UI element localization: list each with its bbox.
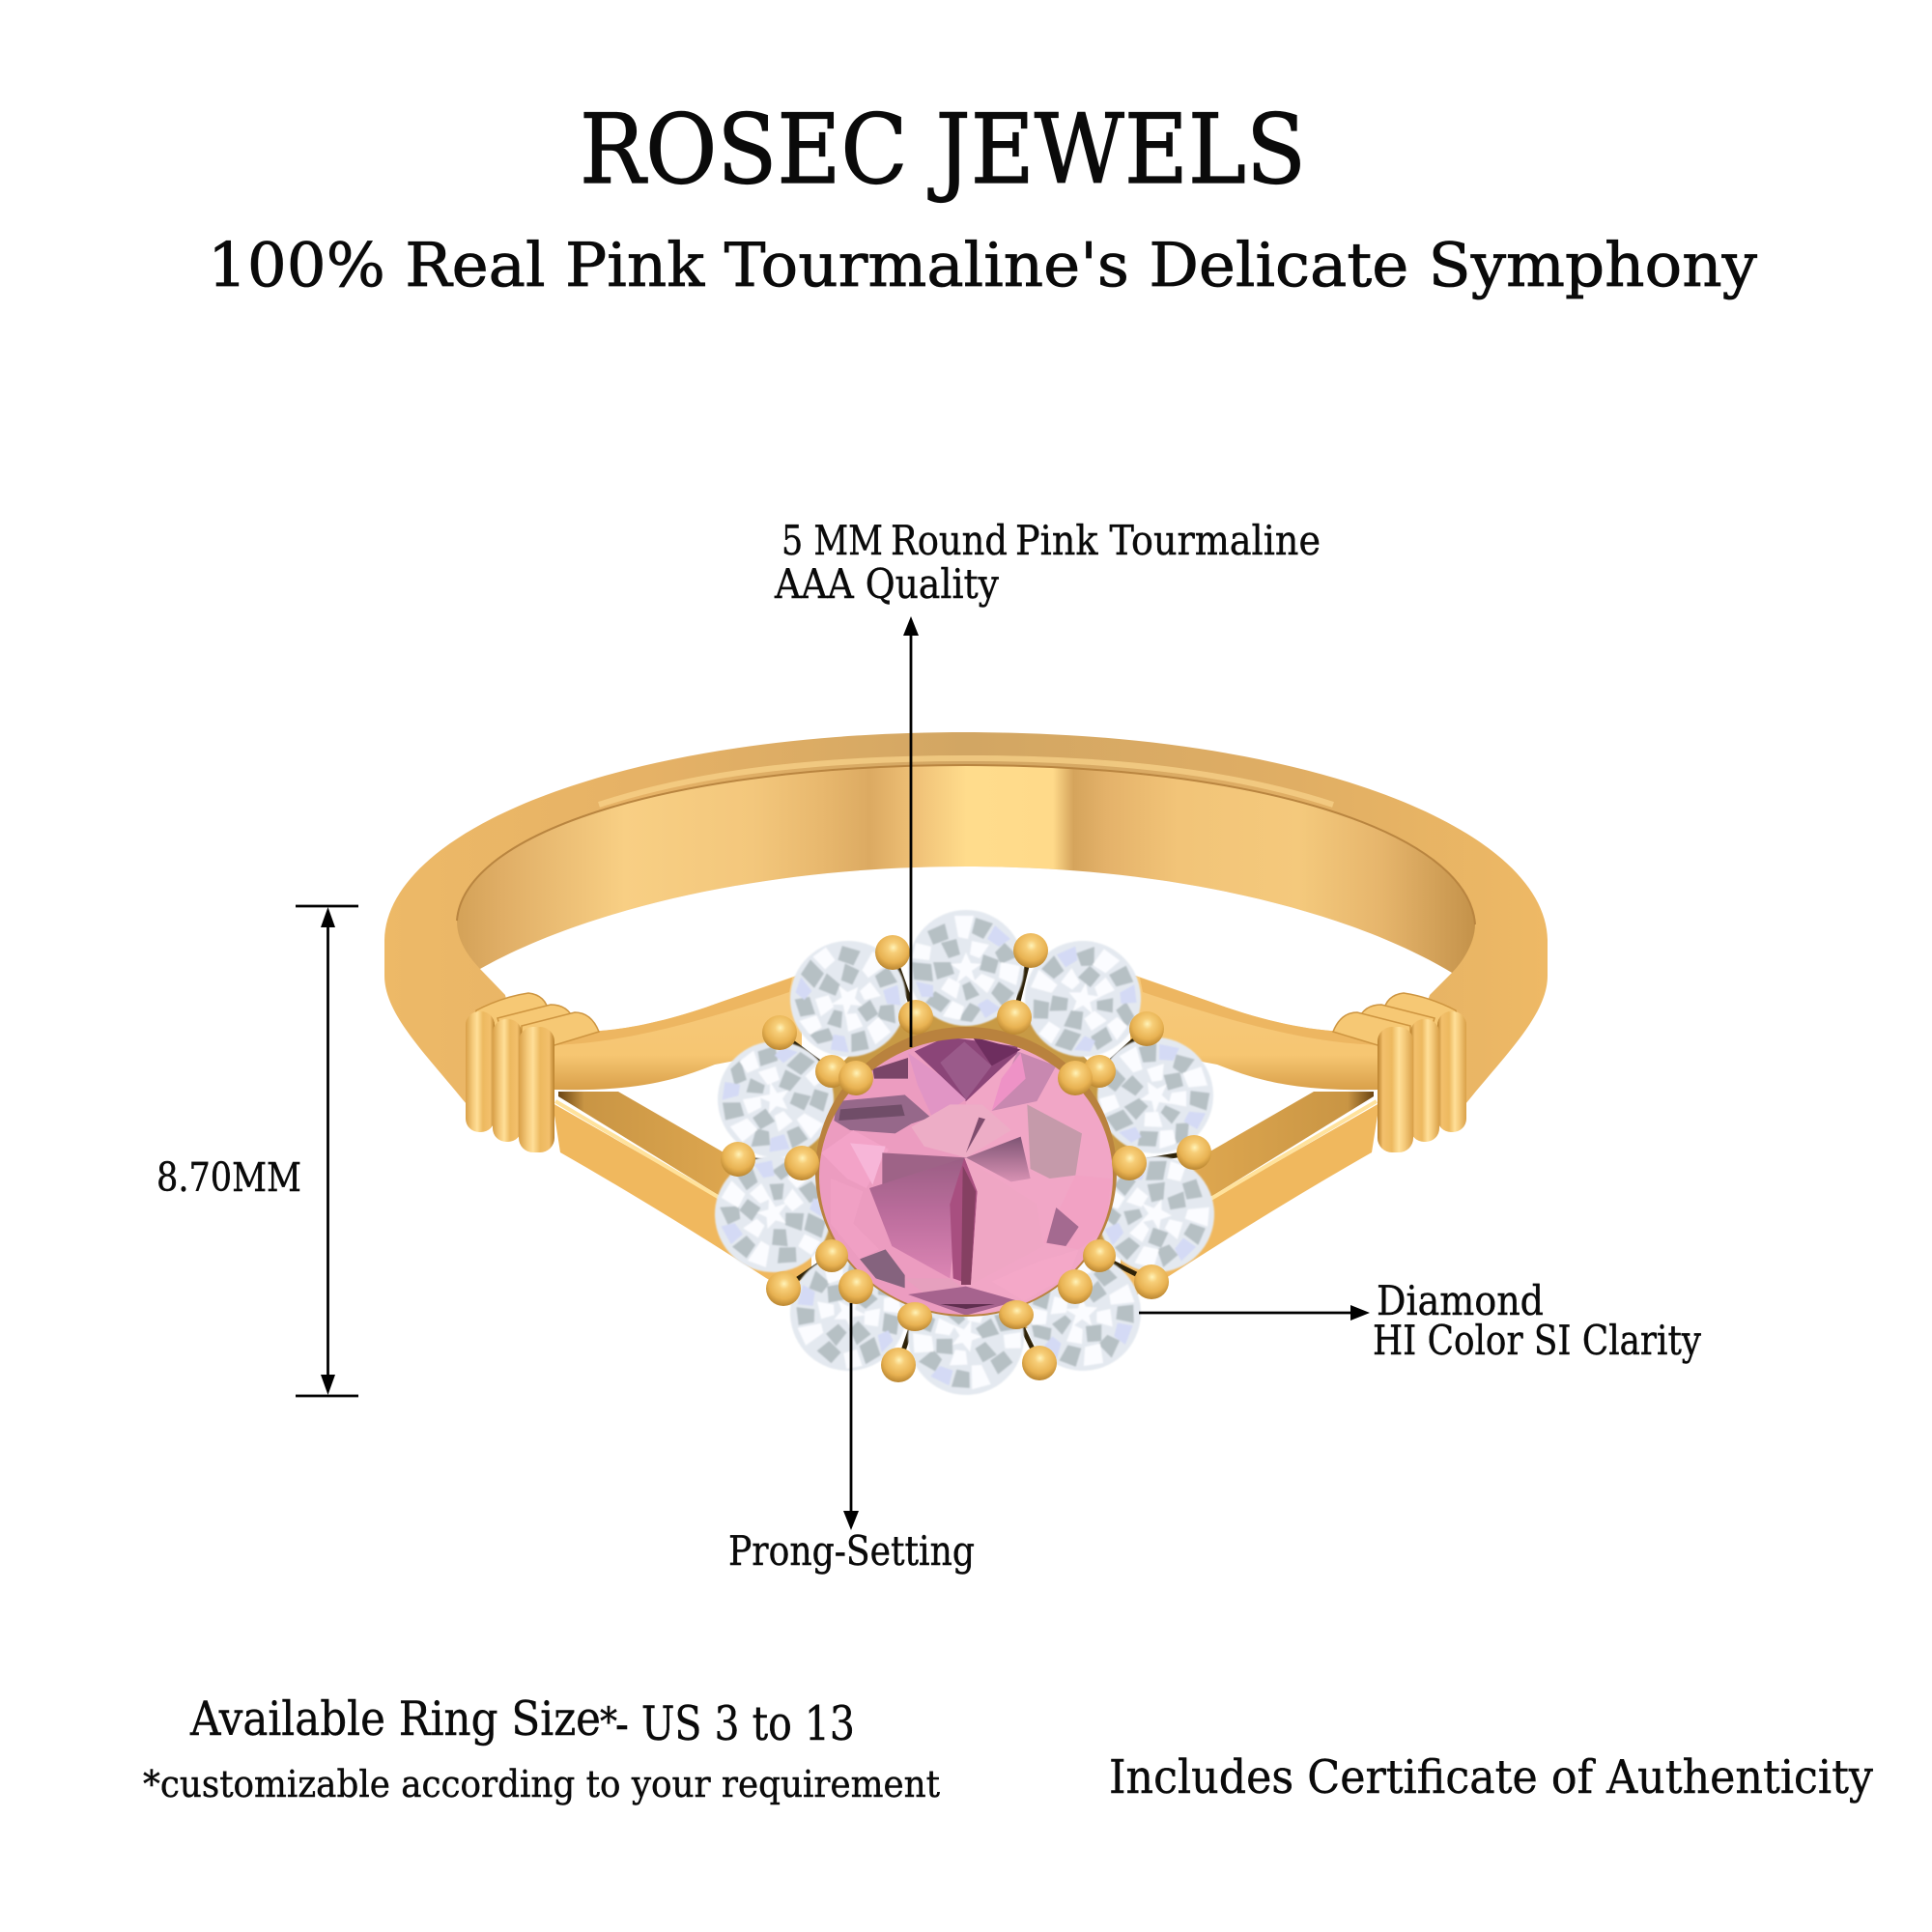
stone seat rim <box>815 1027 1117 1317</box>
text: asterisk: * <box>600 1700 617 1745</box>
band lip highlight <box>457 758 1475 924</box>
gold setting under the stones <box>800 1008 1132 1340</box>
prong wires <box>738 951 1194 1365</box>
label: diamond: Diamond <box>1377 1277 1544 1324</box>
callout: prong setting <box>728 1303 975 1575</box>
diamond right upper <box>1076 1016 1235 1175</box>
diamond right lower <box>1094 1151 1219 1277</box>
diamond top right <box>1006 922 1160 1076</box>
subtitle: 100% Real Pink Tourmaline's Delicate Symphony <box>208 230 1757 300</box>
title: ROSEC JEWELS <box>580 95 1306 206</box>
arrow: to centre stone label <box>903 616 919 1047</box>
ring illustration <box>384 732 1548 1407</box>
label: diamond grade: HI Color SI Clarity <box>1373 1317 1701 1364</box>
callout: diamond <box>1139 1277 1701 1364</box>
dimension arrow <box>296 906 358 1396</box>
arrow: to prong label <box>843 1303 859 1530</box>
diamond bottom left <box>771 1236 925 1390</box>
diamond halo <box>694 910 1235 1407</box>
arrow: to diamond label <box>1139 1305 1370 1321</box>
diamond top <box>908 910 1024 1026</box>
label: height value: 8.70MM <box>156 1154 301 1201</box>
label: centre stone: Pink Tourmaline <box>1015 517 1321 564</box>
ring size note <box>143 1691 940 1805</box>
diamond bottom right <box>1009 1238 1157 1387</box>
certificate note: Includes Certificate of Authenticity <box>1109 1750 1873 1804</box>
text: us sizes: - US 3 to 13 <box>615 1696 855 1751</box>
label: prong setting: Prong-Setting <box>728 1527 975 1575</box>
diamond left lower <box>698 1140 847 1289</box>
dimension: ring height <box>156 906 358 1396</box>
ring band inner surface <box>457 765 1475 973</box>
callout: centre stone <box>774 517 1321 1047</box>
diamond bottom <box>895 1266 1037 1407</box>
diamond left upper <box>694 1017 858 1181</box>
pink tourmaline centre stone <box>811 1034 1121 1323</box>
prongs <box>721 933 1211 1382</box>
left shoulder and collar <box>466 974 811 1304</box>
diamond top left <box>766 917 930 1081</box>
label: stone quality: AAA Quality <box>774 560 999 608</box>
text: customizable note: *customizable according to your requirement <box>143 1763 940 1805</box>
text: available ring size: Available Ring Size <box>189 1691 601 1747</box>
label: centre stone: Round <box>891 517 1008 564</box>
label: centre stone <box>781 517 1321 564</box>
ring band outer surface <box>384 732 1548 1104</box>
white opening of the band <box>480 867 1452 1169</box>
right shoulder and collar <box>1121 974 1466 1304</box>
label: centre stone: 5 MM <box>781 517 883 564</box>
